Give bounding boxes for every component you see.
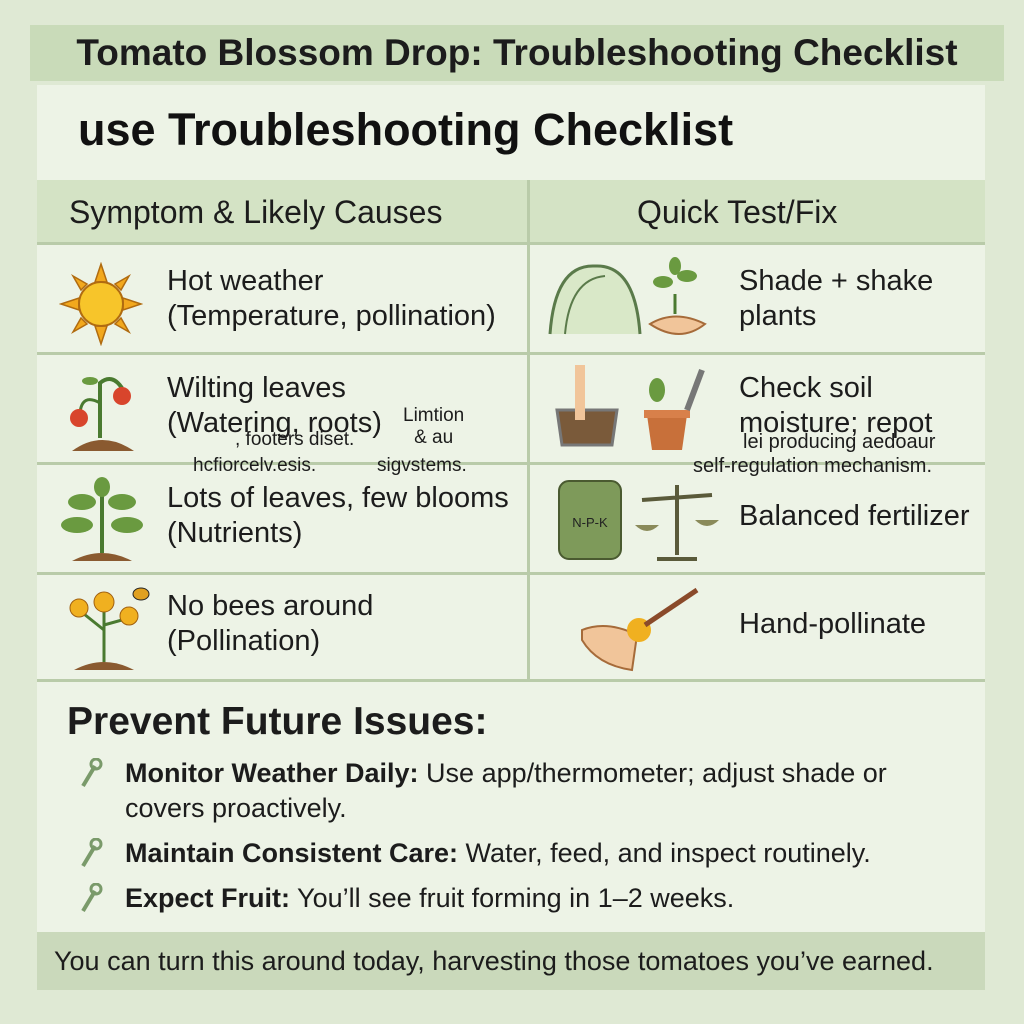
text — [739, 372, 932, 439]
icon: flowers with bee — [70, 588, 150, 670]
icon: sun — [59, 262, 143, 346]
text: Check soil — [739, 372, 873, 404]
table header — [37, 180, 985, 245]
text — [167, 482, 509, 549]
item 1: covers proactively. — [125, 793, 347, 823]
item 1: Monitor Weather Daily: Use app/thermometer; adjust shade or — [125, 758, 887, 788]
row 3: lots of leaves — [61, 455, 970, 561]
text — [739, 265, 933, 332]
icon: wrench — [81, 838, 102, 867]
text: (Pollination) — [167, 625, 320, 657]
table — [37, 180, 985, 682]
text: Lots of leaves, few blooms — [167, 482, 509, 514]
prevent heading: Prevent Future Issues: — [67, 700, 487, 743]
text: moisture; repot — [739, 407, 932, 439]
table header: Symptom & Likely Causes — [69, 194, 442, 230]
footer banner — [37, 932, 985, 990]
text: plants — [739, 300, 816, 332]
text: (Watering, roots) — [167, 407, 382, 439]
icon: shade cloth & handshake — [548, 257, 707, 335]
row 2: wilting — [70, 365, 936, 453]
text: (Nutrients) — [167, 517, 302, 549]
title banner — [30, 25, 1004, 81]
row 2: wilting: lei producing aedoaur — [743, 431, 935, 453]
text — [167, 372, 382, 439]
row 2: wilting: Limtion — [403, 405, 464, 426]
icon: NPK bag and scale: N-P-K — [572, 515, 608, 530]
table header: Quick Test/Fix — [637, 194, 837, 230]
text — [167, 590, 373, 657]
garbled text: hcfiorcelv.esis. — [193, 455, 316, 476]
text: Hand-pollinate — [739, 608, 926, 640]
prevent list — [81, 758, 887, 913]
text: Shade + shake — [739, 265, 933, 297]
text: Wilting leaves — [167, 372, 346, 404]
text: Hot weather — [167, 265, 323, 297]
item 3: Expect Fruit: You’ll see fruit forming in 1–2 weeks. — [125, 883, 734, 913]
item 2: Maintain Consistent Care: Water, feed, and inspect routinely. — [125, 838, 871, 868]
footer banner: You can turn this around today, harvesting those tomatoes you’ve earned. — [54, 946, 934, 976]
subtitle heading: use Troubleshooting Checklist — [78, 104, 733, 155]
row 3: lots of leaves: sigvstems. — [377, 455, 467, 476]
icon: leafy plant — [61, 477, 143, 561]
icon: wrench — [81, 758, 102, 787]
text: No bees around — [167, 590, 373, 622]
icon: NPK bag and scale — [558, 480, 719, 561]
icon: soil check & pot — [555, 365, 705, 450]
item 1 — [81, 758, 887, 823]
row 3: lots of leaves: self-regulation mechanism. — [693, 455, 932, 477]
row 4: no bees — [70, 588, 926, 672]
icon: hand with brush — [581, 588, 698, 672]
text: Balanced fertilizer — [739, 500, 970, 532]
garbled text: , footers diset. — [235, 429, 354, 450]
text: (Temperature, pollination) — [167, 300, 496, 332]
title banner: Tomato Blossom Drop: Troubleshooting Checklist — [76, 32, 958, 73]
row 2: wilting: & au — [414, 427, 453, 448]
icon: wilting tomato plant — [70, 377, 134, 451]
row 1: hot weather — [59, 257, 933, 346]
icon: wrench — [81, 883, 102, 912]
text — [167, 265, 496, 332]
